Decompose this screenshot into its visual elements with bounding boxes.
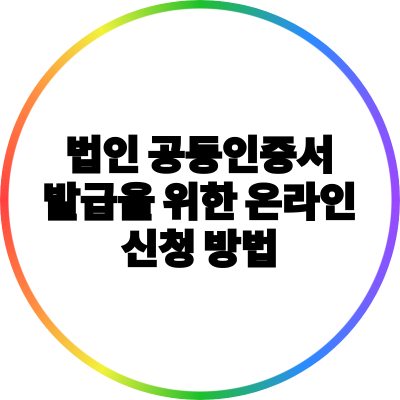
title <box>43 134 357 272</box>
title line 1: 법인 공동인증서 <box>66 134 334 178</box>
title line 3: 신청 방법 <box>122 228 278 272</box>
title line 2: 발급을 위한 온라인 <box>43 182 357 224</box>
